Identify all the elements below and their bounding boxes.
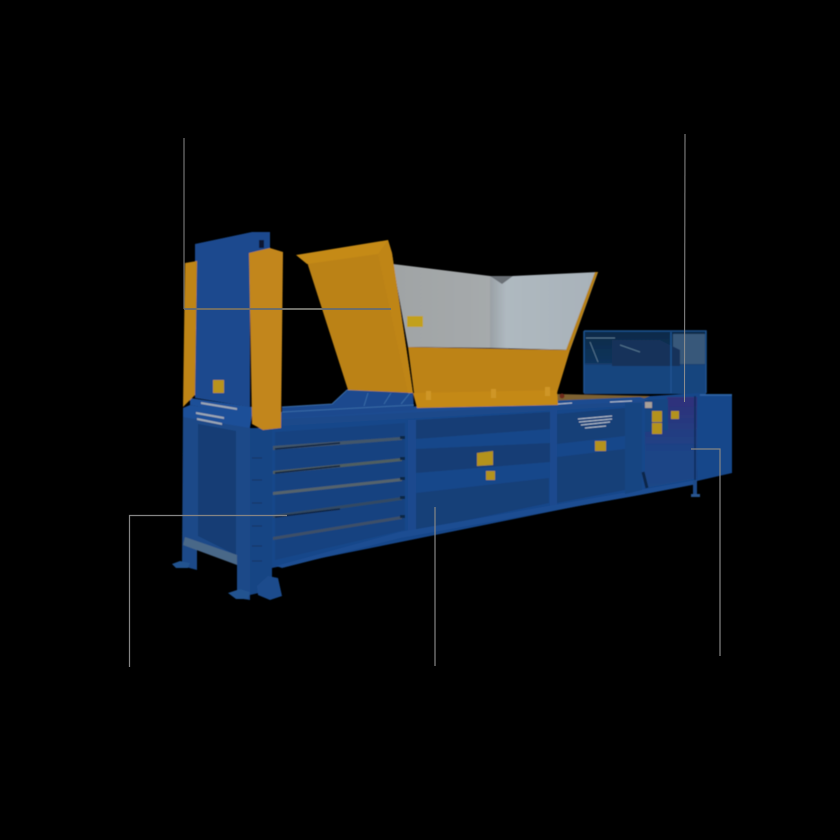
recessed drawers area — [275, 423, 405, 560]
ladder column — [250, 428, 272, 595]
hopper side flap — [296, 240, 413, 393]
white notice text block — [558, 401, 632, 428]
callout line: top left leader — [184, 138, 391, 309]
left blue tower — [195, 232, 270, 407]
tower warning sign — [213, 380, 224, 393]
glass enclosure with motor — [584, 331, 706, 394]
cylinder housing — [625, 403, 642, 494]
right yellow column — [249, 248, 283, 430]
drawer slats — [273, 436, 405, 540]
top rail — [280, 397, 650, 426]
door with purple tint — [645, 397, 697, 488]
hopper yellow apron — [408, 272, 598, 408]
white safety labels — [201, 402, 237, 410]
vertical columns — [408, 420, 416, 537]
callout line: lower left leader — [130, 516, 287, 667]
left yellow strip — [183, 261, 197, 407]
hopper grey liner — [393, 264, 598, 350]
yellow warning signs — [407, 316, 679, 480]
right end power unit box — [697, 394, 732, 481]
feet — [172, 561, 190, 568]
main baler body — [262, 393, 700, 568]
callout line: lower right leader — [691, 449, 720, 656]
recessed panels centre — [416, 412, 550, 439]
callout line: lower centre leader — [434, 507, 436, 666]
baler machine — [172, 232, 732, 600]
lower rail — [276, 480, 697, 568]
front frame — [172, 398, 282, 600]
hopper deck plate — [555, 394, 650, 405]
callout line: top right leader — [684, 134, 686, 402]
platen step — [183, 537, 237, 565]
feed trough grid — [282, 390, 414, 418]
